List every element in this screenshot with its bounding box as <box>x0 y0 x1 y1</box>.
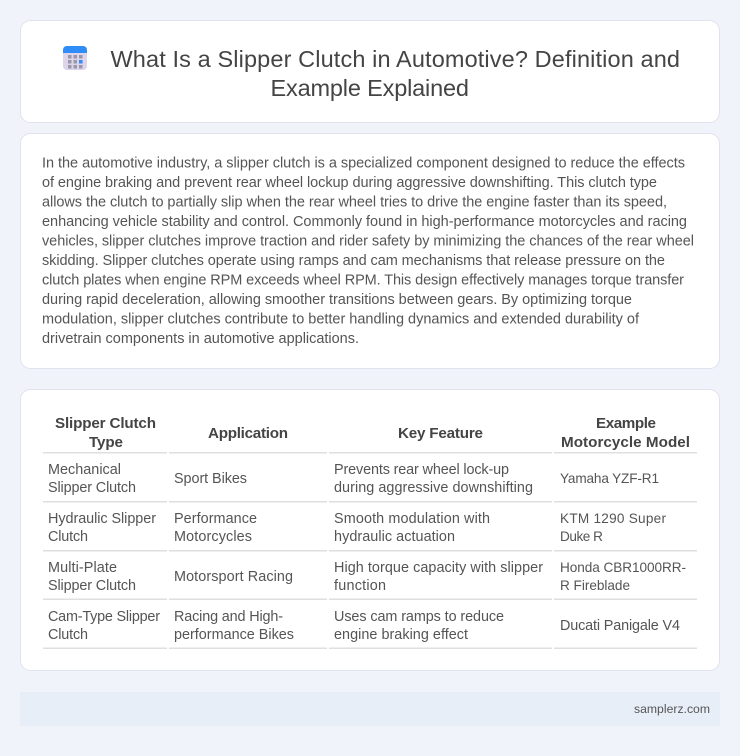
table header row <box>55 415 690 451</box>
table rules <box>43 452 697 649</box>
title: Example Explained <box>270 75 469 101</box>
text block: definition <box>42 156 694 347</box>
table header row: Type <box>89 434 123 451</box>
title: What Is a Slipper Clutch in Automotive? Definition and <box>110 46 680 72</box>
table row: hydraulic: Hydraulic Slipper <box>48 511 156 527</box>
text block: definition: enhancing vehicle stability and control. Commonly found in high-performance motorcycles and racing <box>42 214 687 230</box>
panel: definition paragraph <box>20 134 720 368</box>
footer source text: samplerz.com <box>634 702 710 716</box>
table row: multi-plate: function <box>334 578 386 594</box>
table header row: Example <box>596 415 656 432</box>
table row: multi-plate: Slipper Clutch <box>48 578 136 594</box>
table row: cam-type: engine braking effect <box>334 627 468 643</box>
table row: hydraulic: Motorcycles <box>174 529 252 545</box>
table row: cam-type: Uses cam ramps to reduce <box>334 609 504 625</box>
table row: cam-type: Racing and High- <box>174 609 283 625</box>
footer bar <box>20 692 720 726</box>
icon: calendar <box>63 46 87 70</box>
table header row: Application <box>208 425 288 442</box>
text block: definition: skidding. Slipper clutches operate using ramps and cam mechanisms that release pressure on the <box>42 253 665 269</box>
table row: multi-plate: Motorsport Racing <box>174 569 293 585</box>
table row: hydraulic: Clutch <box>48 529 88 545</box>
table row: mechanical: during aggressive downshifting <box>334 480 533 496</box>
table row: hydraulic: hydraulic actuation <box>334 529 455 545</box>
text block: definition: of engine braking and prevent rear wheel lockup during aggressive downshifting. This clutch type <box>42 175 657 191</box>
table row: multi-plate: High torque capacity with slipper <box>334 560 543 576</box>
table row: cam-type: Cam-Type Slipper <box>48 609 160 625</box>
table row: cam-type: performance Bikes <box>174 627 294 643</box>
text block: definition: vehicles, slipper clutches improve traction and rider safety by minimizing the chances of the rear wheel <box>42 234 694 250</box>
text block: definition: clutch plates when engine RPM exceeds wheel RPM. This design effectively manages torque transfer <box>42 272 684 288</box>
text block: definition: allows the clutch to partially slip when the rear wheel tries to drive the engine faster than its speed, <box>42 194 667 210</box>
table header row: Motorcycle Model <box>561 434 690 451</box>
table row: mechanical <box>48 462 659 496</box>
table row: mechanical: Mechanical <box>48 462 121 478</box>
title <box>110 46 680 101</box>
text block: definition: In the automotive industry, a slipper clutch is a specialized component designed to reduce the effects <box>42 156 685 172</box>
table row: hydraulic: KTM 1290 Super <box>560 511 666 526</box>
table header row: Key Feature <box>398 425 483 442</box>
table header row: Slipper Clutch <box>55 415 156 432</box>
panel: comparison table <box>20 390 720 670</box>
table row: hydraulic: Smooth modulation with <box>334 511 490 527</box>
table row: mechanical: Prevents rear wheel lock-up <box>334 462 509 478</box>
table row: multi-plate <box>48 560 686 594</box>
table row: mechanical: Slipper Clutch <box>48 480 136 496</box>
text block: definition: drivetrain components in automotive applications. <box>42 331 359 347</box>
table row: hydraulic: Performance <box>174 511 257 527</box>
table row: hydraulic: Duke R <box>560 529 603 544</box>
table row: multi-plate: R Fireblade <box>560 578 630 593</box>
table row: cam-type <box>48 609 680 643</box>
table row: hydraulic <box>48 511 666 545</box>
text block: definition: modulation, slipper clutches contribute to better handling dynamics and extended durability of <box>42 312 640 328</box>
table row: multi-plate: Multi-Plate <box>48 560 117 576</box>
table row: cam-type: Clutch <box>48 627 88 643</box>
table row: cam-type: Ducati Panigale V4 <box>560 618 680 634</box>
table row: mechanical: Yamaha YZF-R1 <box>560 471 659 486</box>
panel: title header <box>20 20 720 122</box>
text block: definition: during rapid deceleration, allowing smoother transitions between gears. By optimizing torque <box>42 292 632 308</box>
table row: mechanical: Sport Bikes <box>174 471 247 487</box>
table row: multi-plate: Honda CBR1000RR- <box>560 560 686 575</box>
